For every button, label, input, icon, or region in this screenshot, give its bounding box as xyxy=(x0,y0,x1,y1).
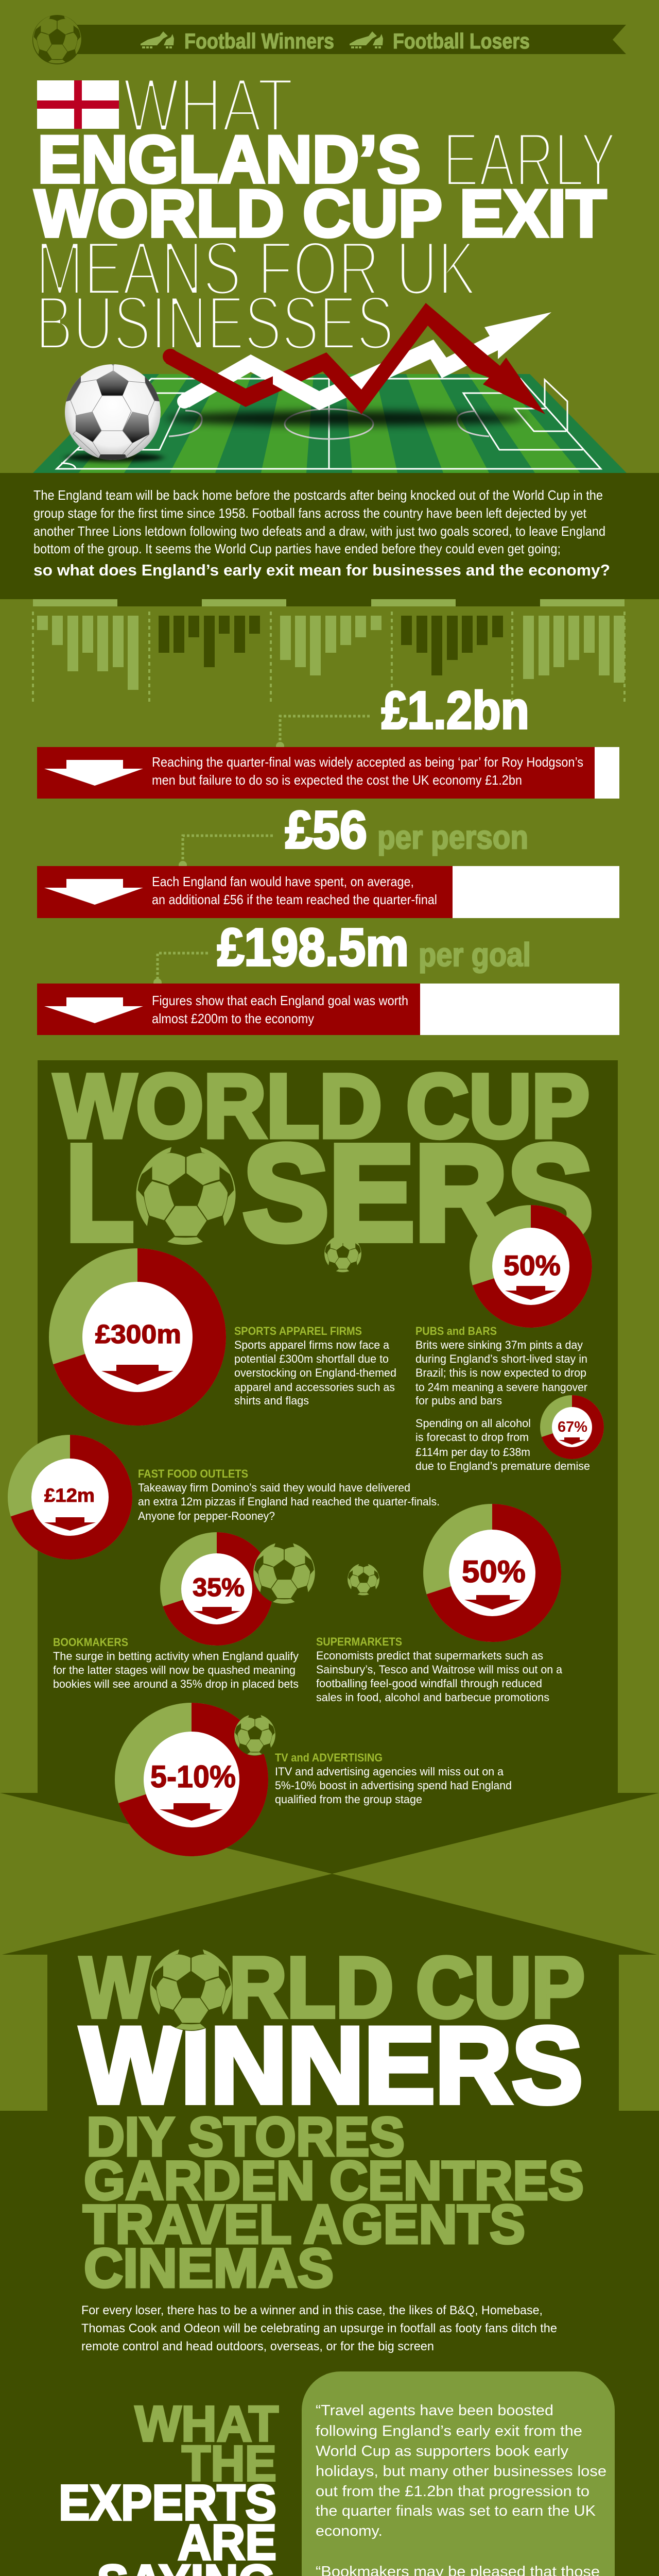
donut: 67% xyxy=(540,1395,604,1459)
title: WORLD CUP EXIT xyxy=(34,176,606,251)
icon: down arrow xyxy=(44,879,143,905)
heading: what the experts are saying: ARE xyxy=(178,2514,276,2570)
bar text: almost £200m to the economy xyxy=(152,1011,314,1026)
heading: world cup losers: L xyxy=(66,1117,134,1268)
stat: £1.2bn: £1.2bn xyxy=(381,681,529,740)
text: tv and advertising: 5%-10% boost in advertising spend had England xyxy=(275,1779,512,1792)
text: bookmakers xyxy=(53,1636,299,1690)
intro text: The England team will be back home before the postcards after being knocked out of the World Cup in the xyxy=(33,487,603,503)
bar text: Figures show that each England goal was worth xyxy=(152,993,408,1008)
text: supermarkets: Sainsbury’s, Tesco and Waitrose will miss out on a xyxy=(316,1663,563,1676)
title: BUSINESSES xyxy=(36,280,394,366)
arrow: red falling xyxy=(163,303,545,414)
stat: £1.2bn xyxy=(276,681,529,750)
text: pubs and bars: due to England’s premature demise xyxy=(415,1460,590,1472)
intro text xyxy=(33,487,605,556)
heading: world cup winners xyxy=(80,1940,585,2126)
intro text: group stage for the first time since 1958. Football fans across the country have been left dejected by yet xyxy=(33,505,587,521)
icon: down arrow xyxy=(44,760,143,786)
text: pubs and bars: Brits were sinking 37m pints a day xyxy=(415,1338,583,1351)
list: winning businesses: TRAVEL AGENTS xyxy=(83,2193,525,2255)
bar: £1.2bn explanation xyxy=(37,747,619,799)
heading: world cup winners: RLD CUP xyxy=(229,1940,585,2036)
text: winners paragraph: For every loser, there has to be a winner and in this case, the likes of B&Q, Homebase, xyxy=(81,2303,543,2317)
bar: £56 explanation xyxy=(37,866,619,918)
nav label winners: Football Winners xyxy=(184,29,334,53)
text: pubs and bars: for pubs and bars xyxy=(415,1394,502,1407)
bar: £198.5m explanation xyxy=(37,984,619,1035)
text: winners paragraph: remote control and head outdoors, overseas, or for the big screen xyxy=(81,2340,434,2353)
icon: football boot winners xyxy=(141,31,174,48)
heading: world cup losers: SERS xyxy=(243,1117,593,1268)
quote text: following England’s early exit from the xyxy=(316,2423,582,2439)
quote text xyxy=(316,2402,611,2576)
text: bookmakers: bookies will see around a 35% drop in placed bets xyxy=(53,1677,299,1690)
stat: £56 per person xyxy=(179,800,528,869)
heading: world cup losers: WORLD CUP xyxy=(54,1056,589,1157)
text: fast food outlets: Anyone for pepper-Rooney? xyxy=(138,1510,275,1522)
text: pubs and bars: during England’s short-lived stay in xyxy=(415,1352,587,1365)
donut: 50% pubs xyxy=(470,1205,592,1328)
text: bookmakers: The surge in betting activity when England qualify xyxy=(53,1650,299,1663)
text: sports apparel firms: overstocking on England-themed xyxy=(234,1366,396,1379)
text: tv and advertising xyxy=(275,1751,512,1806)
quote text: economy. xyxy=(316,2523,383,2539)
quote text: “Travel agents have been boosted xyxy=(316,2402,553,2419)
donut: 50% supermarkets: 50% xyxy=(462,1554,526,1589)
intro question: so what does England’s early exit mean for businesses and the economy? xyxy=(33,561,610,579)
intro panel xyxy=(0,473,659,599)
heading: what the experts are saying: THE xyxy=(182,2435,276,2492)
icon: down arrow xyxy=(44,997,143,1023)
donut: £12m xyxy=(8,1435,132,1560)
ball ground shadow xyxy=(65,453,163,462)
title xyxy=(34,62,616,366)
donut: 50% pubs: 50% xyxy=(504,1249,561,1281)
stat: £198.5m per goal xyxy=(153,918,531,987)
icon: football xyxy=(33,15,81,64)
list: winning businesses: DIY STORES xyxy=(86,2106,405,2167)
stat: £198.5m per goal: per goal xyxy=(419,936,531,973)
quote text: World Cup as supporters book early xyxy=(316,2443,569,2460)
icon: England flag xyxy=(37,80,119,129)
icon: small football xyxy=(324,1236,361,1272)
text: sports apparel firms: potential £300m shortfall due to xyxy=(234,1352,389,1365)
list: winning businesses xyxy=(83,2106,584,2299)
stat: £56 per person: per person xyxy=(377,819,528,856)
bar text xyxy=(152,754,583,788)
arrow: white rising xyxy=(177,312,551,410)
donut: 35%: 35% xyxy=(193,1573,245,1602)
text: fast food outlets xyxy=(138,1467,440,1522)
text: fast food outlets: FAST FOOD OUTLETS xyxy=(138,1467,248,1480)
panel: losers background xyxy=(0,1060,659,1874)
text: winners paragraph xyxy=(81,2303,557,2353)
heading: world cup winners: WINNERS xyxy=(80,2005,583,2126)
bar text xyxy=(152,993,408,1026)
text: pubs and bars: £114m per day to £38m xyxy=(415,1446,530,1459)
heading: world cup losers xyxy=(54,1056,593,1268)
text: pubs and bars: Brazil; this is now expected to drop xyxy=(415,1366,586,1379)
text: pubs and bars xyxy=(415,1325,590,1472)
text: supermarkets: SUPERMARKETS xyxy=(316,1635,402,1648)
text: pubs and bars: Spending on all alcohol xyxy=(415,1417,531,1430)
speech bubble: Julie Palmer xyxy=(302,2371,615,2576)
intro text: bottom of the group. It seems the World Cup parties have ended before they could even get going; xyxy=(33,541,561,556)
text: sports apparel firms: shirts and flags xyxy=(234,1394,309,1407)
text: fast food outlets: Takeaway firm Domino’s said they would have delivered xyxy=(138,1481,410,1494)
stat: £198.5m per goal: £198.5m xyxy=(217,918,409,977)
icon: football boot losers xyxy=(350,31,383,48)
icon: small football xyxy=(348,1564,379,1595)
text: supermarkets: sales in food, alcohol and barbecue promotions xyxy=(316,1691,549,1704)
quote text: out from the £1.2bn that progression to xyxy=(316,2483,589,2500)
bar text: Each England fan would have spent, on average, xyxy=(152,874,414,889)
stat: £56 per person: £56 xyxy=(285,800,367,859)
football pitch xyxy=(33,374,627,473)
text: sports apparel firms: SPORTS APPAREL FIRMS xyxy=(234,1325,362,1337)
text: winners paragraph: Thomas Cook and Odeon will be celebrating an upsurge in footfall as footy fans ditch the xyxy=(81,2321,557,2335)
text: pubs and bars: to 24m meaning a severe hangover xyxy=(415,1381,587,1394)
text: pubs and bars: PUBS and BARS xyxy=(415,1325,497,1337)
bar text xyxy=(152,874,437,907)
bar text: Reaching the quarter-final was widely accepted as being ‘par’ for Roy Hodgson’s xyxy=(152,754,583,770)
icon: football beside 35% donut xyxy=(253,1543,315,1604)
text: sports apparel firms xyxy=(234,1325,396,1407)
list: winning businesses: GARDEN CENTRES xyxy=(84,2149,584,2211)
text: tv and advertising: TV and ADVERTISING xyxy=(275,1751,383,1764)
text: tv and advertising: qualified from the group stage xyxy=(275,1793,422,1806)
nav label losers: Football Losers xyxy=(393,29,530,53)
quote text: holidays, but many other businesses lose xyxy=(316,2463,606,2480)
text: supermarkets: footballing feel-good windfall through reduced xyxy=(316,1677,542,1690)
donut: 67%: 67% xyxy=(558,1419,587,1435)
quote text: the quarter finals was set to earn the UK xyxy=(316,2503,596,2519)
icon: football beside 5-10% donut xyxy=(234,1715,275,1756)
text: tv and advertising: ITV and advertising agencies will miss out on a xyxy=(275,1765,504,1778)
bar chart decoration xyxy=(33,599,625,703)
donut: £300m xyxy=(49,1248,226,1426)
donut: £300m: £300m xyxy=(95,1319,181,1349)
navigation ribbon xyxy=(33,15,626,64)
heading: what the experts are saying: EXPERTS xyxy=(59,2475,276,2531)
pitch shadow xyxy=(165,411,525,426)
heading: what the experts are saying xyxy=(59,2396,279,2576)
bar text: men but failure to do so is expected the cost the UK economy £1.2bn xyxy=(152,772,522,788)
donut: 35% xyxy=(160,1532,273,1646)
intro text: another Three Lions letdown following two defeats and a draw, with just two goals scored, to leave England xyxy=(33,523,605,539)
title: MEANS FOR UK xyxy=(36,225,476,311)
text: bookmakers: BOOKMAKERS xyxy=(53,1636,128,1649)
donut: 5-10%: 5-10% xyxy=(150,1759,236,1794)
icon: football as O in losers xyxy=(136,1147,236,1245)
text: pubs and bars: is forecast to drop from xyxy=(415,1431,529,1444)
title: ENGLAND’S xyxy=(38,122,421,197)
title: WHAT xyxy=(123,62,293,148)
heading: what the experts are saying: WHAT xyxy=(135,2396,279,2452)
donut: 50% supermarkets xyxy=(423,1504,561,1642)
icon: 3D football xyxy=(65,364,161,460)
donut: £12m: £12m xyxy=(44,1485,95,1506)
text: sports apparel firms: apparel and accessories such as xyxy=(234,1381,395,1394)
donut: 5-10% xyxy=(115,1703,268,1856)
text: fast food outlets: an extra 12m pizzas if England had reached the quarter-finals. xyxy=(138,1495,440,1508)
panel: winners background xyxy=(0,1874,659,2576)
text: supermarkets xyxy=(316,1635,563,1704)
heading: world cup winners: W xyxy=(80,1940,149,2036)
bar text: an additional £56 if the team reached the quarter-final xyxy=(152,892,437,907)
icon: football as O in winners xyxy=(150,1948,232,2031)
text: supermarkets: Economists predict that supermarkets such as xyxy=(316,1649,543,1662)
text: bookmakers: for the latter stages will now be quashed meaning xyxy=(53,1664,296,1676)
list: winning businesses: CINEMAS xyxy=(84,2237,334,2299)
text: sports apparel firms: Sports apparel firms now face a xyxy=(234,1338,390,1351)
